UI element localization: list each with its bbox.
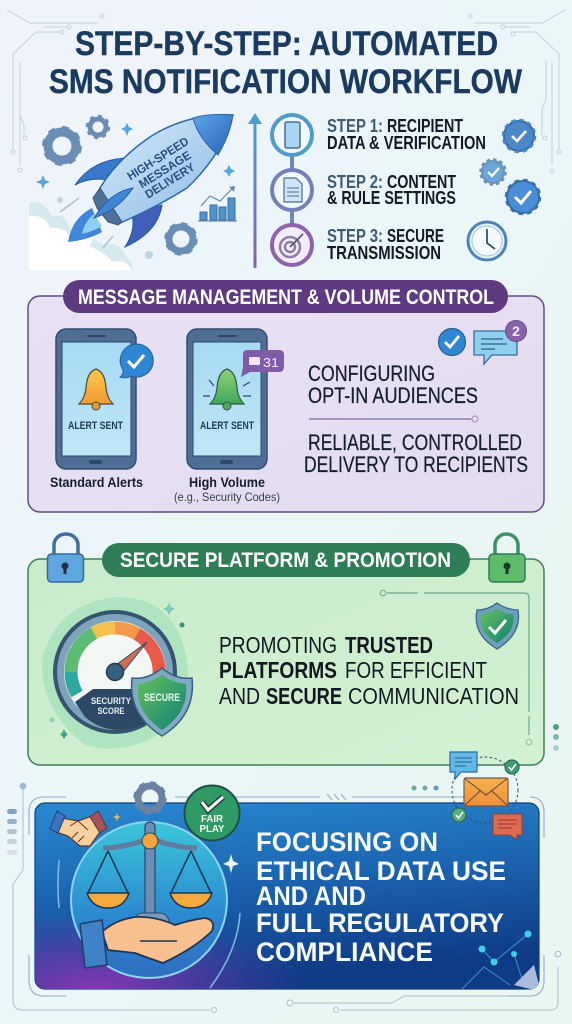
step 3 text: TRANSMISSION [327, 243, 441, 263]
icon: gear [135, 783, 165, 813]
icon: rocket fins [75, 158, 162, 247]
phone captions [50, 474, 280, 504]
side status bars [7, 809, 17, 855]
rocket label: HIGH-SPEED [124, 134, 192, 183]
step 2 text: STEP 2: [327, 172, 383, 192]
text: ethical compliance: FULL REGULATORY [256, 908, 504, 938]
steps column [272, 115, 486, 265]
heading pill: SECURE PLATFORM & PROMOTION [120, 549, 451, 572]
icon: blue message [450, 752, 477, 779]
panel: message management [28, 280, 544, 512]
text: promoting trusted platforms: PLATFORMS [219, 657, 337, 683]
step 1 text [327, 116, 486, 153]
badge: fair play: FAIR [201, 813, 223, 825]
heading pill [102, 543, 470, 577]
icon: blue lock [48, 534, 84, 582]
icon: scales in circle [58, 822, 240, 988]
step 1 text: STEP 1: [327, 116, 383, 136]
phone: standard alerts: ALERT SENT [68, 420, 123, 432]
icon: check and chat [438, 320, 526, 364]
icon: gear lower [166, 224, 196, 254]
icon: step 2 document [272, 170, 312, 210]
icon: security gauge: SECURITY [91, 696, 132, 707]
icon: check bubble [120, 344, 153, 378]
text: reliable delivery: RELIABLE, CONTROLLED [308, 430, 522, 455]
text: promoting trusted platforms: FOR EFFICIENT [345, 657, 487, 683]
text: ethical compliance: COMPLIANCE [256, 937, 433, 967]
text: promoting trusted platforms: TRUSTED [345, 632, 433, 658]
phone captions: Standard Alerts [50, 474, 143, 490]
title: STEP-BY-STEP: AUTOMATED [75, 25, 498, 63]
icon: open hand [80, 917, 213, 968]
icon: communication cluster [450, 752, 522, 840]
illustration: rocket launch [29, 114, 237, 270]
text: ethical compliance [256, 827, 506, 967]
divider [309, 416, 478, 422]
heading pill: MESSAGE MANAGEMENT & VOLUME CONTROL [78, 286, 494, 309]
heading pill [63, 280, 508, 313]
icon: red message [493, 814, 522, 840]
step 2 text [327, 172, 456, 208]
rocket label: DELIVERY [142, 160, 197, 201]
phone: standard alerts [56, 329, 136, 469]
step 3 text [327, 226, 444, 263]
text: opt-in audiences: OPT-IN AUDIENCES [308, 383, 478, 408]
icon: gear large [44, 128, 80, 164]
icon: secure shield [132, 668, 192, 736]
text: opt-in audiences: CONFIGURING [308, 361, 435, 386]
icon: secure shield: SECURE [144, 692, 180, 704]
side dots [553, 724, 559, 751]
icon: growth bar chart [198, 186, 237, 221]
icon: gear small [87, 116, 109, 138]
badge: fair play: PLAY [200, 823, 224, 835]
text: opt-in audiences [308, 361, 478, 408]
panel frame [29, 797, 544, 996]
step 3 text: STEP 3: [327, 226, 383, 246]
icon: verification badges [480, 120, 540, 214]
icon: message count bubble: 31 [263, 355, 279, 370]
panel: secure platform [28, 534, 544, 765]
icon: small shield check [476, 603, 519, 649]
icon: check and chat: 2 [512, 323, 520, 339]
text: ethical compliance: AND AND [256, 881, 366, 911]
arrow: upward progress [248, 113, 262, 268]
icon: rocket body [93, 114, 233, 225]
step 2 text: & RULE SETTINGS [327, 188, 456, 208]
step 1 text: RECIPIENT [387, 116, 463, 136]
icon: step 1 phone [272, 115, 312, 155]
decorative trace [387, 593, 529, 735]
icon: green checks [452, 760, 519, 822]
text: promoting trusted platforms: AND [219, 683, 260, 709]
phone captions: High Volume [189, 474, 265, 490]
icon: security gauge [42, 597, 188, 749]
text: ethical compliance: ETHICAL DATA USE [256, 856, 506, 886]
text: reliable delivery [304, 430, 528, 477]
icon: message count bubble [241, 350, 284, 377]
icon: gauge sparkles [50, 603, 184, 739]
connector lines [290, 155, 294, 225]
step 1 text: DATA & VERIFICATION [327, 133, 486, 153]
text: ethical compliance: FOCUSING ON [256, 827, 438, 857]
icon: security gauge: SCORE [98, 706, 124, 717]
step 3 text: SECURE [387, 226, 444, 246]
icon: envelope [464, 778, 508, 806]
text: promoting trusted platforms: PROMOTING [219, 632, 337, 658]
text: promoting trusted platforms [219, 632, 519, 709]
icon: green lock [489, 534, 525, 582]
icon: dashes and dots [327, 786, 438, 800]
icon: sparkles [36, 123, 235, 259]
icon: flame [68, 208, 102, 242]
phone: high volume [187, 329, 267, 469]
phone: high volume: ALERT SENT [200, 420, 254, 432]
icon: clock [468, 222, 506, 260]
rocket label [124, 134, 197, 201]
icon: data network [462, 930, 539, 989]
icon: step 3 target [272, 225, 312, 265]
text: promoting trusted platforms: SECURE [266, 683, 342, 709]
rocket label: MESSAGE [136, 148, 194, 191]
step 2 text: CONTENT [387, 172, 456, 192]
icon: exhaust cloud [29, 202, 133, 270]
icon: handshake [50, 811, 107, 846]
text: promoting trusted platforms: COMMUNICATION [348, 683, 519, 709]
decorative end nodes [20, 590, 561, 957]
panel: ethical data [35, 803, 539, 989]
badge: fair play [184, 786, 240, 840]
phone captions: (e.g., Security Codes) [174, 490, 280, 504]
title [49, 25, 523, 101]
icon: sparkles [113, 813, 239, 873]
